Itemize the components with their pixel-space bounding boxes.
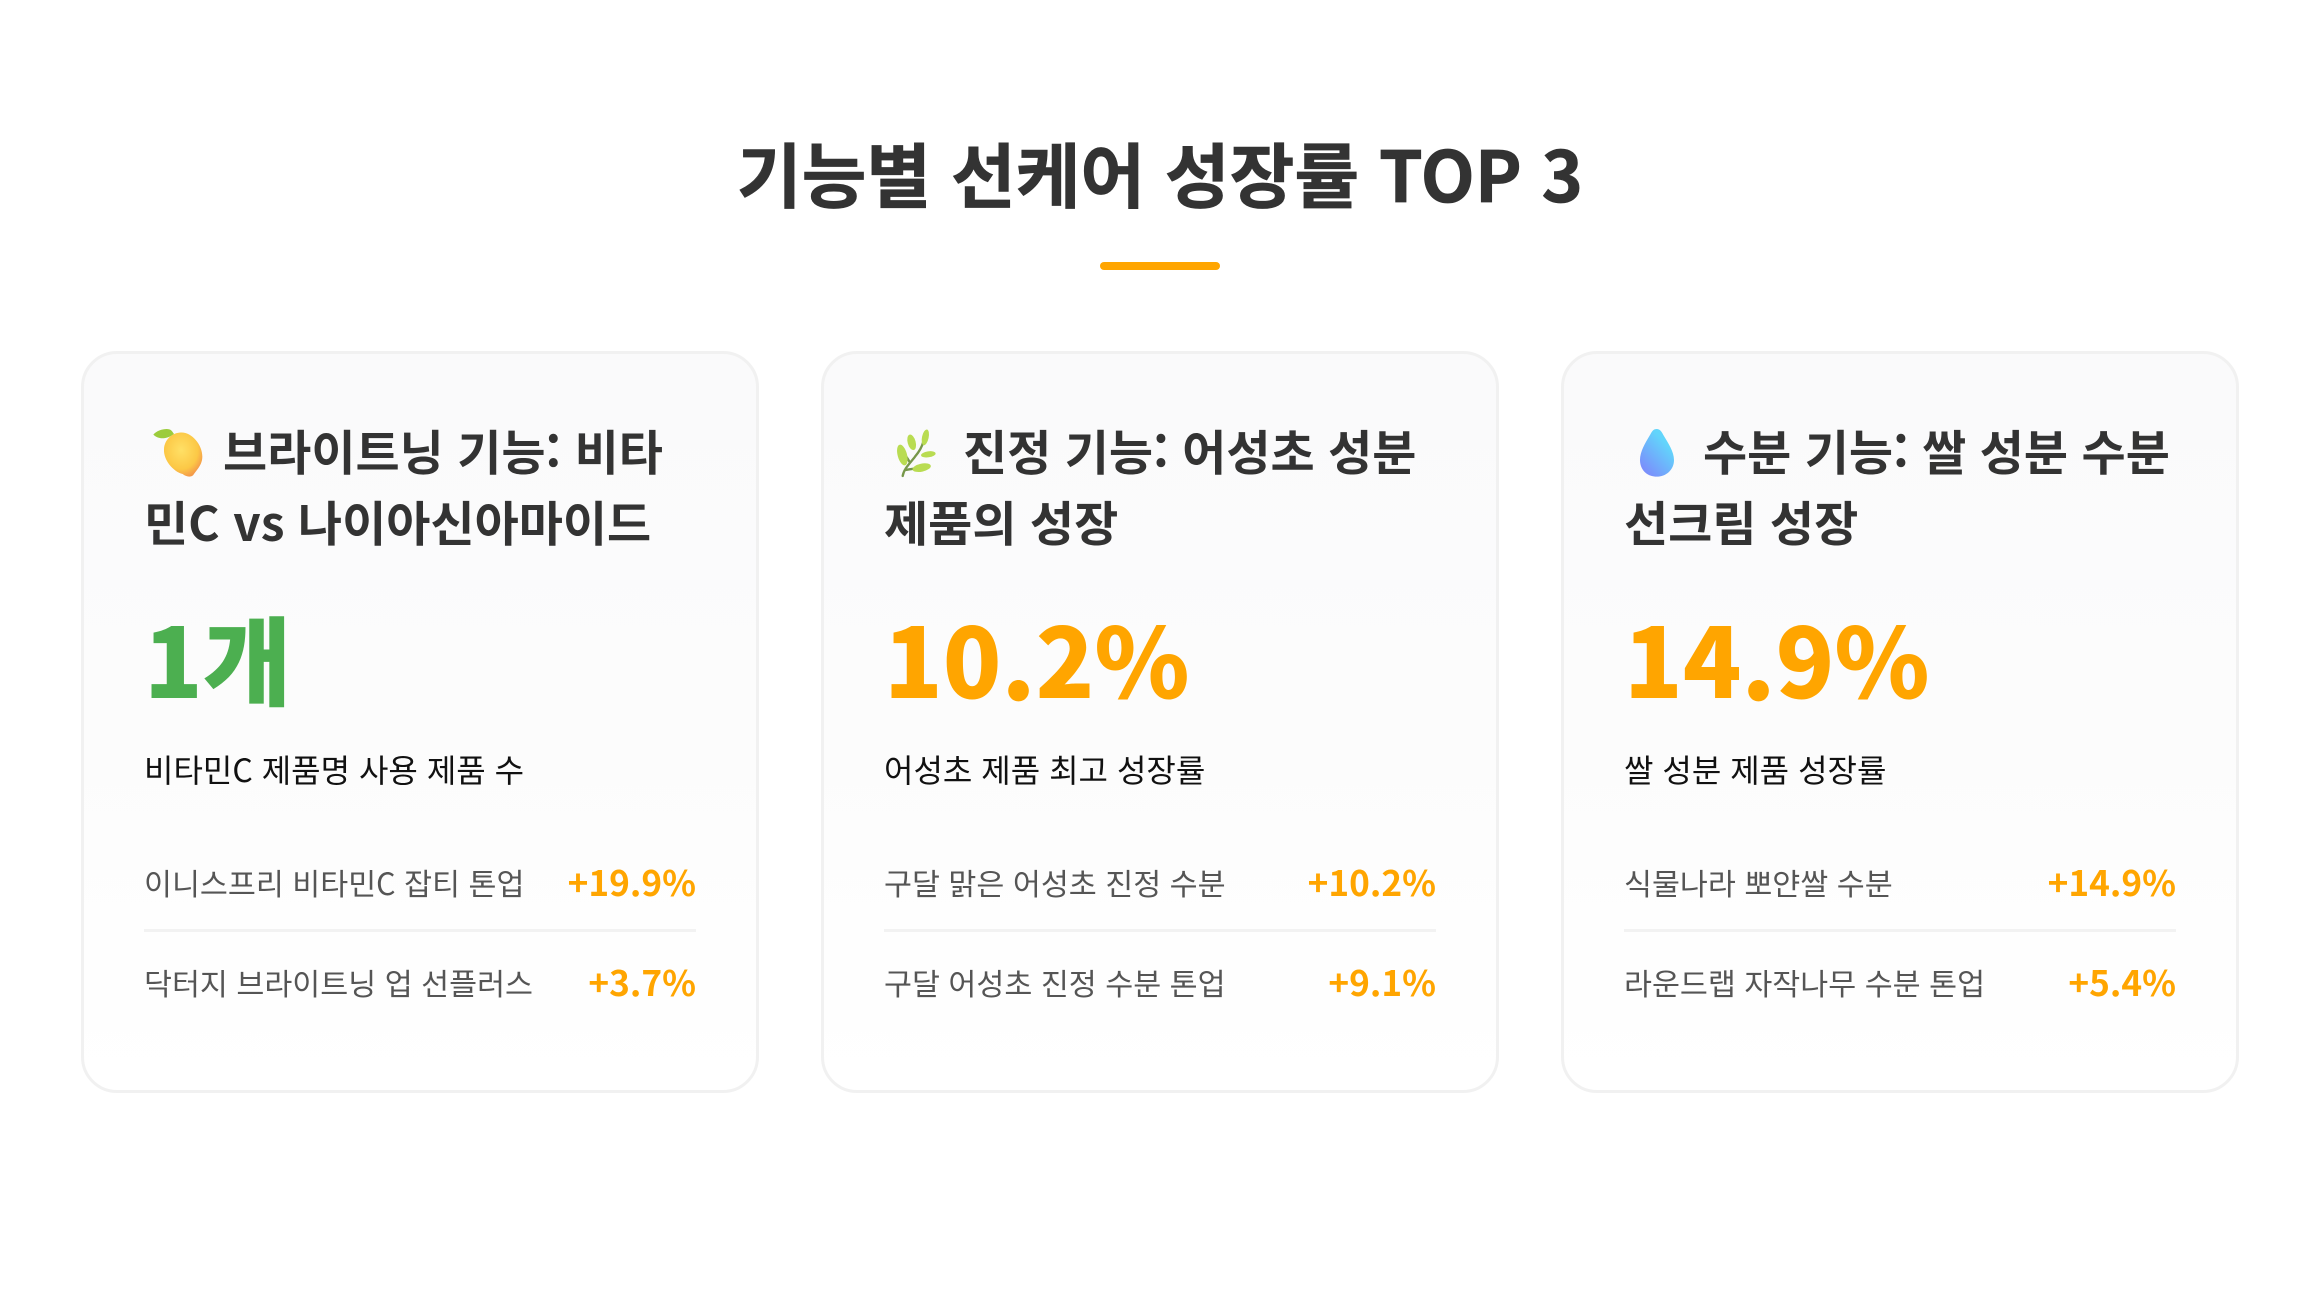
icon: herb [897,430,936,478]
product row 1 [1624,856,2176,907]
product row 2 [1624,956,2176,1007]
product row 2: +9.1% [1328,956,1436,1007]
panel: brightening [81,351,759,1093]
panel: hydration [1561,351,2239,1093]
product row 1: +10.2% [1308,856,1436,907]
product row 1 [144,856,696,907]
product row 1 [884,856,1436,907]
product row 2 [884,956,1436,1007]
panel heading [144,414,663,555]
product row 2 [144,956,696,1007]
product row 1: 구달 맑은 어성초 진정 수분 [884,860,1226,904]
panel heading: 민C vs 나이아신아마이드 [144,485,651,555]
product row 2: +5.4% [2068,956,2176,1007]
title: 기능별 선케어 성장률 TOP 3 [737,121,1583,223]
panel heading: 브라이트닝 기능: 비타 [223,414,663,484]
big stat: 1개 [144,586,292,726]
product row 1: 식물나라 뽀얀쌀 수분 [1624,860,1893,904]
product row 2: +3.7% [588,956,696,1007]
stat caption: 쌀 성분 제품 성장률 [1624,746,1886,792]
panel heading: 진정 기능: 어성초 성분 [963,414,1416,484]
panel heading: 수분 기능: 쌀 성분 수분 [1703,414,2170,484]
big stat: 14.9% [1624,586,1930,726]
product row 2: 라운드랩 자작나무 수분 톤업 [1624,960,1985,1004]
icon: lemon [153,429,202,477]
panel heading: 제품의 성장 [884,485,1118,555]
big stat: 10.2% [884,586,1190,726]
product row 2: 구달 어성초 진정 수분 톤업 [884,960,1226,1004]
panel heading [884,414,1416,555]
panel: soothing [821,351,1499,1093]
product row 1: +19.9% [568,856,696,907]
panel heading: 선크림 성장 [1624,485,1858,555]
product row 2: 닥터지 브라이트닝 업 선플러스 [144,960,533,1004]
product row 1: 이니스프리 비타민C 잡티 톤업 [144,860,524,904]
icon: water drop [1640,429,1674,477]
stat caption: 어성초 제품 최고 성장률 [884,746,1205,792]
title accent bar [1100,262,1220,270]
product row 1: +14.9% [2048,856,2176,907]
stat caption: 비타민C 제품명 사용 제품 수 [144,746,524,792]
panel heading [1624,414,2170,555]
